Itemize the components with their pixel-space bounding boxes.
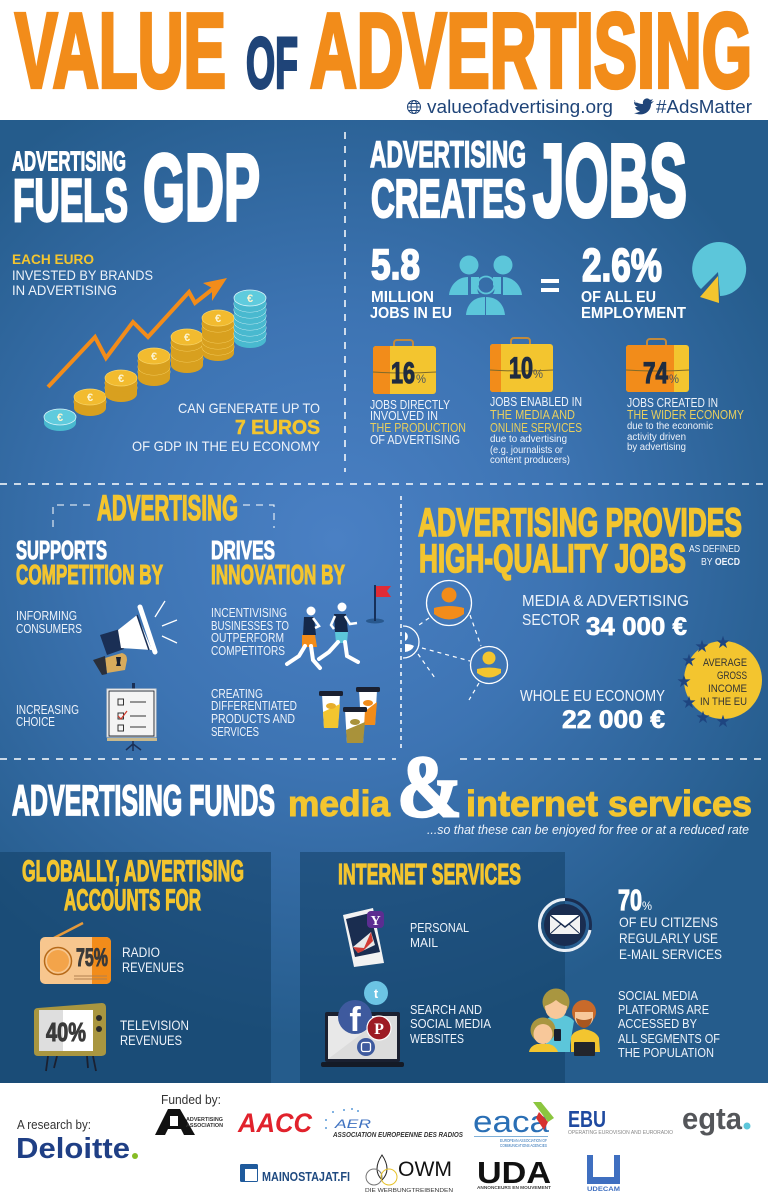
logo: eaca: EUROPEAN ASSOCIATION OF: [500, 1138, 547, 1143]
icon: family: [529, 988, 600, 1056]
column: drives innovation: COMPETITORS: [211, 644, 285, 658]
panel: competition and innovation: [16, 488, 391, 751]
stat: 2.6 percent: 2.6%: [582, 239, 662, 291]
text: jobs enabled: (e.g. journalists or: [490, 445, 564, 456]
briefcase 74 percent: 74: [643, 357, 668, 390]
text: radio revenues: [122, 945, 184, 975]
text: generates 7 euros: 7 EUROS: [235, 417, 320, 439]
text: personal mail: PERSONAL: [410, 920, 469, 935]
footer: [16, 1092, 750, 1194]
icon: radio 75 percent: [40, 923, 111, 984]
column: drives innovation: DRIVES: [211, 535, 275, 565]
heading: fuels GDP: FUELS: [13, 167, 128, 234]
column: drives innovation: PRODUCTS AND: [211, 712, 295, 726]
panel: globally advertising accounts for: [0, 852, 271, 1083]
icon: flag: [366, 585, 391, 624]
logo: UDA: ANNONCEURS EN MOUVEMENT: [477, 1185, 551, 1190]
badge: average gross income: GROSS: [717, 670, 747, 682]
header: [15, 0, 752, 117]
research credit: Deloitte: [16, 1133, 130, 1165]
column: supports competition: COMPETITION BY: [16, 559, 163, 590]
panel: advertising creates jobs: [370, 123, 746, 466]
stat: whole EU income: [520, 688, 665, 734]
logo: advertising association: [155, 1109, 223, 1135]
column: supports competition: CHOICE: [16, 715, 55, 729]
stat: whole EU income: 22 000 €: [562, 706, 665, 734]
text: jobs directly involved: INVOLVED IN: [370, 409, 438, 423]
badge: average gross income: ★: [681, 693, 697, 712]
logo: egta: egta: [682, 1101, 743, 1136]
text: television revenues: TELEVISION: [120, 1018, 189, 1033]
text: jobs enabled: THE MEDIA AND: [490, 408, 575, 422]
badge: average gross income: INCOME: [708, 683, 747, 695]
section dividers: [0, 132, 768, 759]
icon: phone mail: Y: [370, 914, 381, 929]
icon: laptop with social icons: P: [374, 1021, 384, 1038]
icon: television 40 percent: [34, 1003, 106, 1071]
icon: checklist board: [107, 683, 157, 751]
icon: globe: [408, 100, 420, 114]
text: jobs created: THE WIDER ECONOMY: [627, 408, 745, 422]
stat: 70 percent email: E-MAIL SERVICES: [619, 946, 722, 962]
text: each euro: [12, 252, 153, 298]
briefcase 16 percent: [373, 340, 436, 394]
equals sign: [541, 279, 559, 292]
badge: average gross income: AVERAGE: [703, 657, 747, 669]
stat: 5.8 million jobs: JOBS IN EU: [370, 305, 452, 322]
heading: creates jobs: CREATES: [371, 169, 526, 229]
stat: 70 percent email: 70: [618, 885, 642, 917]
text: jobs created: activity driven: [627, 432, 686, 443]
text: jobs created: by advertising: [627, 442, 686, 453]
text: radio revenues: REVENUES: [122, 960, 184, 975]
stat: media sector income: [522, 593, 689, 641]
logo: EBU: OPERATING EUROVISION AND EURORADIO: [568, 1130, 674, 1136]
text: each euro: INVESTED BY BRANDS: [12, 267, 153, 283]
icon: laptop with social icons: f: [349, 1001, 361, 1039]
icon: runners: [287, 602, 358, 668]
text: each euro: IN ADVERTISING: [12, 282, 117, 298]
column: drives innovation: [211, 535, 345, 739]
stat: 70 percent email: OF EU CITIZENS: [619, 914, 718, 930]
funders label: Funded by:: [161, 1092, 221, 1107]
text: jobs directly involved: JOBS DIRECTLY: [370, 398, 451, 412]
network of people: [403, 580, 508, 700]
column: drives innovation: INNOVATION BY: [211, 559, 345, 590]
column: supports competition: INFORMING: [16, 609, 77, 623]
badge: average gross income: ★: [715, 633, 731, 652]
logo: eaca: COMMUNICATIONS AGENCIES: [500, 1143, 547, 1148]
column: drives innovation: CREATING: [211, 687, 263, 701]
chart: pie 2.6 percent: [692, 242, 746, 303]
heading: globally: [22, 855, 244, 917]
heading: fuels GDP: ADVERTISING: [12, 146, 126, 176]
briefcase 10 percent: %: [533, 367, 543, 381]
icon: email ring 70 percent: [539, 900, 590, 951]
heading: advertising: ADVERTISING: [97, 488, 238, 528]
logo: AACC: AACC: [237, 1108, 312, 1138]
badge: average gross income: ★: [681, 651, 697, 670]
badge: average gross income: IN THE EU: [700, 696, 747, 708]
text: social media platforms: SOCIAL MEDIA: [618, 988, 698, 1003]
icon: coffee cups: [319, 687, 380, 743]
text: radio revenues: RADIO: [122, 945, 160, 960]
heading: advertising funds media and internet services: media: [288, 783, 391, 824]
logo: eaca: [473, 1102, 554, 1148]
icon: laptop with social icons: [321, 981, 404, 1067]
briefcase 16 percent: %: [416, 372, 426, 386]
text: social media platforms: ALL SEGMENTS OF: [618, 1031, 720, 1046]
column: drives innovation: DIFFERENTIATED: [211, 699, 297, 713]
logo: AER: ASSOCIATION EUROPEENNE DES RADIOS: [332, 1132, 463, 1139]
column: drives innovation: OUTPERFORM: [211, 631, 284, 645]
text: search and social: [410, 1002, 491, 1046]
text: search and social: SEARCH AND: [410, 1002, 482, 1017]
text: jobs enabled: JOBS ENABLED IN: [490, 395, 582, 409]
badge: average gross income: ★: [695, 708, 711, 727]
heading: fuels GDP: [12, 135, 260, 241]
icon: phone mail: [343, 908, 384, 967]
text: social media platforms: ACCESSED BY: [618, 1016, 697, 1031]
text: jobs directly involved: THE PRODUCTION: [370, 421, 466, 435]
heading: advertising funds media and internet services: ADVERTISING FUNDS: [12, 777, 275, 825]
icon: three people: [449, 256, 522, 315]
heading: advertising funds media and internet services: ...so that these can be enjoyed for free or at a reduced rate: [427, 823, 749, 837]
logo: UDA: UDA: [477, 1155, 551, 1190]
stat: 5.8 million jobs: MILLION: [371, 289, 434, 306]
title: [15, 0, 752, 110]
text: jobs directly involved: OF ADVERTISING: [370, 433, 460, 447]
icon: coin stacks: €: [247, 293, 253, 305]
text: search and social: SOCIAL MEDIA: [410, 1016, 491, 1031]
column: supports competition: SUPPORTS: [16, 535, 107, 565]
stat: whole EU income: WHOLE EU ECONOMY: [520, 688, 665, 705]
column: supports competition: CONSUMERS: [16, 622, 82, 636]
stat: 70 percent email: [618, 885, 722, 962]
heading: creates jobs: ADVERTISING: [370, 134, 526, 175]
icon: megaphone: [93, 601, 177, 675]
stat: 2.6 percent: [581, 239, 686, 322]
research credit: [16, 1117, 138, 1165]
text: generates 7 euros: OF GDP IN THE EU ECONOMY: [132, 438, 321, 454]
logo: AER: AER: [334, 1117, 371, 1131]
logo: OWM: DIE WERBUNGTREIBENDEN: [365, 1188, 454, 1194]
heading: high-quality jobs: [418, 501, 742, 581]
briefcase 74 percent: %: [669, 372, 679, 386]
stat: 2.6 percent: EMPLOYMENT: [581, 305, 686, 322]
text: social media platforms: THE POPULATION: [618, 1045, 714, 1060]
text: each euro: EACH EURO: [12, 252, 94, 267]
logo: advertising association: ADVERTISING: [186, 1117, 223, 1123]
text: generates 7 euros: [132, 400, 321, 454]
text: jobs created: [627, 396, 745, 453]
briefcase 10 percent: [490, 338, 553, 392]
icon: coin stacks: [44, 290, 266, 431]
logo: AER: [325, 1108, 463, 1139]
text: television revenues: REVENUES: [120, 1033, 182, 1048]
icon: coin stacks: €: [151, 351, 157, 363]
briefcase 10 percent: 10: [509, 352, 533, 385]
stat: 70 percent email: %: [642, 899, 652, 913]
column: drives innovation: SERVICES: [211, 725, 259, 739]
stat: media sector income: 34 000 €: [586, 613, 687, 641]
briefcase 74 percent: [626, 339, 689, 392]
stat: 5.8 million jobs: [370, 241, 452, 322]
column: drives innovation: INCENTIVISING: [211, 606, 287, 620]
text: jobs enabled: content producers): [490, 455, 570, 466]
text: jobs enabled: due to advertising: [490, 434, 567, 445]
text: jobs created: JOBS CREATED IN: [627, 396, 718, 410]
dashed bracket: [53, 505, 274, 528]
stat: media sector income: SECTOR: [522, 612, 580, 629]
badge: average gross income: ★: [694, 637, 710, 656]
logo: UDECAM: UDECAM: [587, 1187, 620, 1193]
icon: coin stacks: €: [184, 332, 190, 344]
text: jobs created: due to the economic: [627, 421, 713, 432]
heading: advertising funds media and internet services: &: [397, 739, 462, 836]
badge: average gross income: [676, 633, 762, 731]
briefcase 16 percent: 16: [391, 357, 415, 390]
logo: EBU: [568, 1106, 674, 1136]
heading: creates jobs: [370, 123, 687, 238]
panel: internet services: [300, 852, 565, 1083]
text: search and social: WEBSITES: [410, 1031, 464, 1046]
column: supports competition: [16, 535, 163, 729]
logo: OWM: OWM: [398, 1158, 452, 1181]
logo: mainostajat: [240, 1164, 350, 1184]
icon: twitter bird: [634, 98, 654, 114]
text: generates 7 euros: CAN GENERATE UP TO: [178, 400, 320, 416]
title: OF: [246, 24, 298, 104]
icon: radio 75 percent: 75%: [76, 944, 108, 972]
research credit: A research by:: [17, 1117, 91, 1132]
icon: coin stacks: €: [87, 392, 93, 404]
note: as defined by OECD: BY OECD: [701, 557, 740, 568]
logo: mainostajat: MAINOSTAJAT.FI: [262, 1169, 350, 1184]
badge: average gross income: ★: [676, 672, 692, 691]
icon: coin stacks: €: [57, 412, 63, 424]
text: jobs directly involved: [370, 398, 466, 447]
heading: advertising funds media and internet services: [12, 739, 752, 837]
stat: 2.6 percent: OF ALL EU: [581, 289, 656, 306]
icon: coin stacks: €: [118, 373, 124, 385]
text: personal mail: [410, 920, 469, 950]
panel: high-quality jobs: [403, 501, 762, 734]
heading: globally: ACCOUNTS FOR: [64, 884, 201, 917]
stat: media sector income: MEDIA & ADVERTISING: [522, 593, 689, 610]
text: television revenues: [120, 1018, 189, 1048]
website: valueofadvertising.org: [427, 97, 613, 117]
text: social media platforms: PLATFORMS ARE: [618, 1002, 709, 1017]
heading: globally: GLOBALLY, ADVERTISING: [22, 855, 244, 888]
heading: fuels GDP: GDP: [143, 135, 260, 241]
icon: television 40 percent: 40%: [46, 1017, 86, 1047]
text: jobs enabled: [490, 395, 582, 466]
stat: 70 percent email: REGULARLY USE: [619, 930, 718, 946]
column: supports competition: INCREASING: [16, 703, 79, 717]
text: social media platforms: [618, 988, 720, 1060]
logo: UDECAM: [587, 1155, 620, 1193]
column: drives innovation: BUSINESSES TO: [211, 619, 289, 633]
logo: eaca: eaca: [473, 1104, 550, 1139]
icon: laptop with social icons: t: [374, 986, 379, 1001]
stat: 5.8 million jobs: 5.8: [371, 241, 420, 289]
icon: coin stacks: €: [215, 313, 221, 325]
hashtag: #AdsMatter: [656, 97, 752, 117]
logo: advertising association: ASSOCIATION: [186, 1123, 223, 1129]
logo: EBU: EBU: [568, 1106, 606, 1132]
badge: average gross income: ★: [715, 712, 731, 731]
arrow: rising trend: [48, 278, 227, 387]
heading: internet services: INTERNET SERVICES: [338, 859, 521, 891]
note: as defined by OECD: [689, 544, 740, 568]
text: jobs enabled: ONLINE SERVICES: [490, 421, 582, 435]
text: personal mail: MAIL: [410, 935, 438, 950]
logo: OWM: [365, 1155, 454, 1194]
panel: advertising fuels GDP: [12, 135, 321, 454]
note: as defined by OECD: AS DEFINED: [689, 544, 740, 555]
heading: advertising funds media and internet services: internet services: [466, 783, 752, 824]
